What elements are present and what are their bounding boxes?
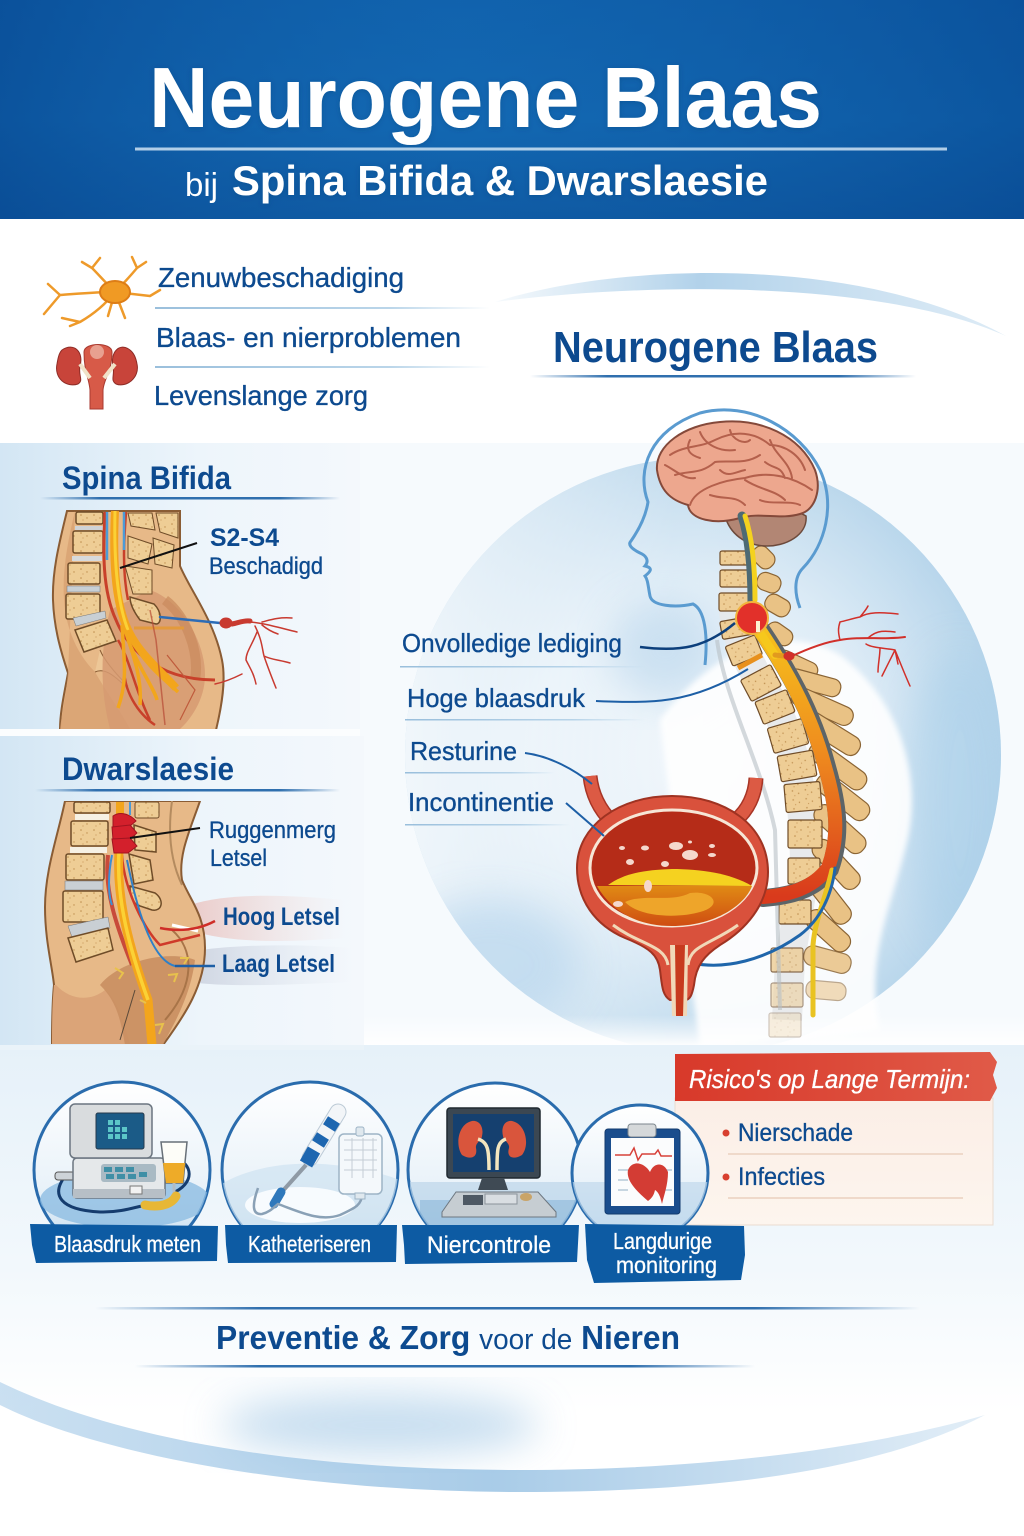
footer line bbox=[95, 1307, 920, 1310]
icon: catheter and bag bbox=[220, 1080, 400, 1225]
icon: neuron bbox=[44, 257, 160, 326]
banner: Blaasdruk meten: Blaasdruk meten bbox=[54, 1231, 201, 1257]
callout: Onvolledige lediging: Onvolledige lediging bbox=[402, 628, 622, 658]
wall bbox=[577, 796, 768, 1000]
risk item: Nierschade bbox=[738, 1119, 853, 1147]
marker: lesion bbox=[736, 602, 768, 634]
label: S2-S4 bbox=[210, 524, 279, 552]
callout: Resturine bbox=[405, 736, 592, 784]
banner: Katheteriseren bbox=[225, 1225, 397, 1263]
title: Neurogene Blaas bbox=[149, 51, 822, 146]
urethra bbox=[670, 945, 688, 1016]
list item: Blaas- en nierproblemen bbox=[156, 322, 461, 353]
spine: vertebrae and processes bbox=[719, 543, 873, 1037]
leader line bbox=[130, 828, 200, 838]
spinal injury bbox=[112, 814, 137, 853]
label: Beschadigd bbox=[209, 553, 323, 580]
banner: Blaasdruk meten bbox=[30, 1224, 218, 1263]
label: Hoog Letsel bbox=[223, 903, 340, 931]
bottom wave bbox=[0, 1382, 985, 1492]
callout: Hoge blaasdruk: Hoge blaasdruk bbox=[407, 683, 586, 713]
label: Laag Letsel bbox=[222, 950, 335, 978]
risk item bbox=[722, 1163, 963, 1199]
cerebellum bbox=[725, 509, 806, 546]
label: Ruggenmerg bbox=[209, 817, 336, 844]
callout: Hoge blaasdruk bbox=[405, 669, 748, 720]
head outline bbox=[630, 410, 828, 665]
footer underline bbox=[135, 1365, 755, 1368]
urine bbox=[597, 886, 752, 926]
cerebrum bbox=[657, 421, 818, 521]
risk item: Infecties bbox=[738, 1163, 825, 1191]
spine guide lines bbox=[717, 640, 780, 1010]
yellow layer bbox=[608, 869, 752, 886]
panel: intro list bbox=[44, 257, 490, 411]
icon: kidney check bbox=[406, 1082, 578, 1225]
footer text: Preventie & Zorg voor de Nieren bbox=[216, 1319, 680, 1356]
inner cavity bbox=[590, 810, 757, 926]
bubbles bbox=[613, 840, 716, 907]
callout: Incontinentie: Incontinentie bbox=[408, 787, 554, 817]
anatomy: sacral spine with nerves bbox=[53, 511, 224, 730]
severity band: low bbox=[190, 945, 352, 985]
list item: Zenuwbeschadiging bbox=[158, 262, 404, 293]
icon: monitoring clipboard bbox=[570, 1104, 710, 1226]
subtitle prefix: bij bbox=[185, 166, 218, 203]
anatomy: spine with injury bbox=[45, 801, 215, 1045]
brain bbox=[657, 421, 818, 546]
icon: bladder pressure measurement bbox=[32, 1080, 212, 1226]
leader high bbox=[160, 921, 215, 930]
heading: Neurogene Blaas: Neurogene Blaas bbox=[553, 323, 878, 372]
callout: Incontinentie bbox=[405, 787, 604, 836]
disc marker bbox=[738, 655, 762, 668]
heading underline bbox=[530, 375, 916, 378]
panel: Dwarslaesie bbox=[0, 736, 364, 1050]
leader line bbox=[120, 543, 197, 568]
severity band: high bbox=[190, 896, 345, 941]
panel: long-term risks bbox=[675, 1052, 997, 1225]
panel: central background bbox=[360, 443, 1024, 1053]
panel: lower background bbox=[0, 1045, 1024, 1536]
spinous processes bbox=[749, 543, 873, 1001]
risk header bbox=[675, 1052, 997, 1101]
ureters bbox=[590, 776, 756, 822]
banner: Katheteriseren: Katheteriseren bbox=[248, 1231, 371, 1257]
nerve branch bbox=[784, 606, 910, 686]
banner: Langdurige monitoring: Langdurige bbox=[613, 1228, 712, 1254]
vertebral bodies bbox=[719, 551, 822, 1037]
banner: Langdurige monitoring bbox=[585, 1224, 745, 1283]
title divider bbox=[135, 148, 947, 150]
risk item bbox=[722, 1119, 963, 1155]
heading: Spina Bifida bbox=[62, 460, 231, 496]
leader low bbox=[175, 965, 215, 967]
header band bbox=[0, 0, 1024, 219]
list item: Levenslange zorg bbox=[154, 380, 368, 411]
swoosh bbox=[495, 273, 1006, 336]
callout: Onvolledige lediging bbox=[400, 623, 735, 668]
callout: Resturine: Resturine bbox=[410, 736, 517, 766]
label: Letsel bbox=[210, 845, 267, 872]
subtitle: Spina Bifida & Dwarslaesie bbox=[232, 157, 768, 204]
nerve tract: spinal cord bbox=[692, 516, 837, 1015]
bladder bbox=[577, 776, 768, 1016]
banner: Niercontrole: Niercontrole bbox=[427, 1232, 551, 1259]
banner: Niercontrole bbox=[402, 1225, 579, 1264]
nerve branch bbox=[160, 617, 297, 688]
panel: Spina Bifida bbox=[0, 443, 360, 736]
heading: Dwarslaesie bbox=[62, 751, 234, 787]
disc column bbox=[734, 550, 805, 1020]
banner: Langdurige monitoring: monitoring bbox=[616, 1252, 717, 1278]
icon: kidneys and bladder bbox=[57, 344, 137, 409]
risk title: Risico's op Lange Termijn: bbox=[689, 1064, 970, 1094]
